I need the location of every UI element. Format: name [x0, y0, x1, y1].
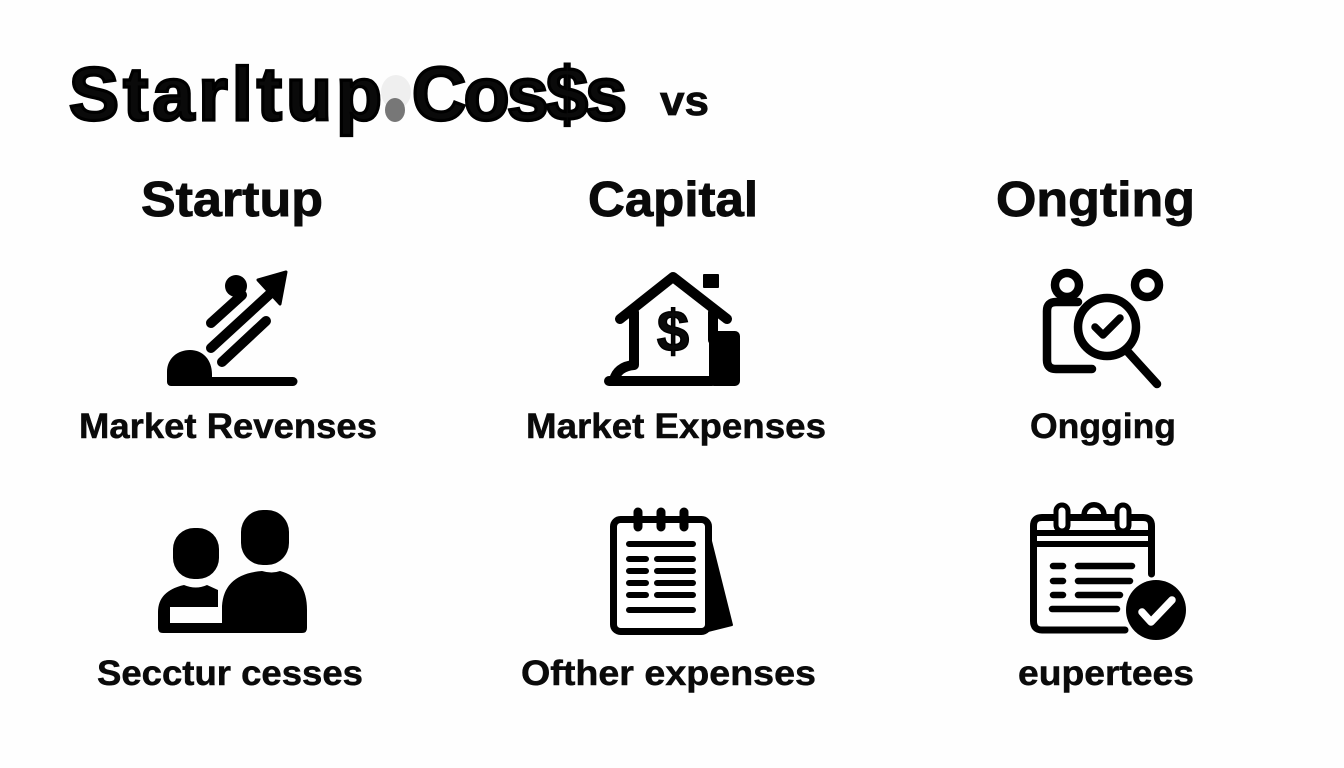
heading: Startup: Startup	[141, 173, 323, 227]
icon: two people	[158, 510, 307, 633]
title text right: Cos$s	[412, 52, 627, 136]
icon: house with dollar	[609, 274, 740, 386]
heading: Ongoing: Ongting	[996, 173, 1195, 227]
icon: person with magnifier	[1047, 273, 1159, 384]
title vs: vs	[660, 77, 709, 124]
title dot ornament	[381, 75, 411, 122]
label: Market Revenses: Market Revenses	[79, 407, 377, 446]
label: eupertees: eupertees	[1018, 654, 1194, 693]
label: Ofther expenses: Ofther expenses	[521, 654, 816, 693]
icon: calendar with check	[1034, 505, 1186, 640]
icon: house with dollar: $	[657, 299, 689, 364]
heading: Capital: Capital	[588, 173, 758, 227]
title text left: Starltup	[69, 52, 382, 136]
label: Ongging: Ongging	[1030, 407, 1176, 446]
label: Market Expenses: Market Expenses	[526, 407, 826, 446]
icon: rising arrow	[167, 272, 298, 386]
title	[69, 52, 709, 136]
label: Secctur cesses: Secctur cesses	[97, 654, 363, 693]
icon: notepad	[614, 512, 732, 632]
